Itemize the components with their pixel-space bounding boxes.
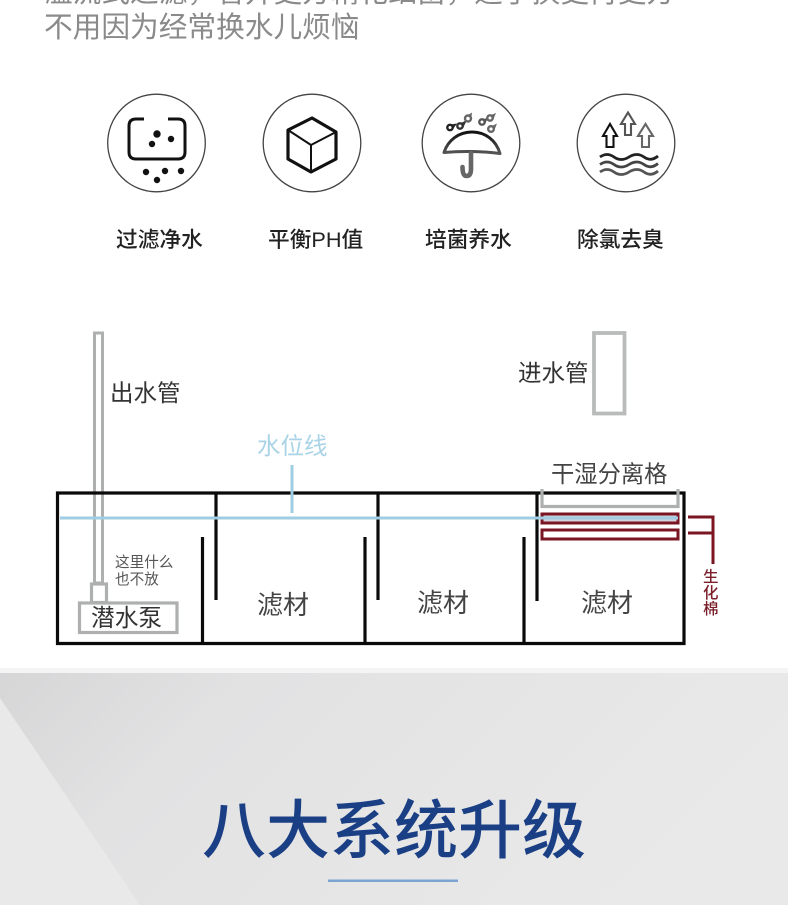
icon: cube: [263, 94, 361, 192]
outlet pipe: [94, 333, 102, 583]
outlet pipe label: 出水管: [110, 380, 180, 406]
banner: eight system upgrades: [0, 668, 788, 905]
icon: filter water: [108, 94, 205, 192]
empty chamber note: 也不放: [115, 571, 159, 588]
water level label: 水位线: [257, 433, 328, 459]
water line: [60, 516, 678, 520]
heading: 八大系统升级: [202, 795, 586, 867]
function labels: 培菌养水: [425, 227, 512, 252]
bio cotton label: 棉: [703, 600, 719, 618]
icon: umbrella: [422, 94, 520, 192]
chart: sump tank diagram: [58, 333, 719, 644]
separator label: 干湿分离格: [551, 461, 667, 487]
submersible pump: 潜水泵: [91, 605, 162, 632]
inlet pipe: [594, 333, 624, 414]
inlet pipe label: 进水管: [518, 360, 588, 386]
intro text: 不用因为经常换水儿烦恼: [44, 12, 360, 44]
dry wet separator tray: [542, 489, 678, 506]
filter media labels: 滤材: [257, 590, 309, 620]
filter media labels: 滤材: [581, 588, 633, 618]
bio cotton layers: [542, 514, 678, 539]
empty chamber note: 这里什么: [115, 554, 173, 571]
function labels: 除氯去臭: [577, 227, 664, 252]
intro text: [44, 0, 675, 44]
filter media labels: 滤材: [417, 588, 469, 618]
bio cotton label: [703, 568, 719, 618]
function labels: 平衡PH值: [268, 227, 363, 252]
water level pointer: [290, 465, 294, 513]
bio cotton bracket: [688, 517, 713, 564]
panel: four functions: [108, 94, 675, 252]
submersible pump: [80, 584, 177, 632]
tank dividers: [202, 493, 537, 644]
empty chamber note: [115, 554, 173, 588]
bio cotton label: 生: [703, 568, 719, 586]
heading underline: [328, 880, 458, 882]
icon: evaporation: [577, 94, 675, 192]
function labels: 过滤净水: [116, 227, 203, 252]
tank outline: [58, 493, 684, 644]
light triangle: [0, 698, 140, 905]
filter media labels: [257, 588, 633, 620]
function labels: [116, 227, 664, 252]
bio cotton label: 化: [703, 584, 719, 602]
